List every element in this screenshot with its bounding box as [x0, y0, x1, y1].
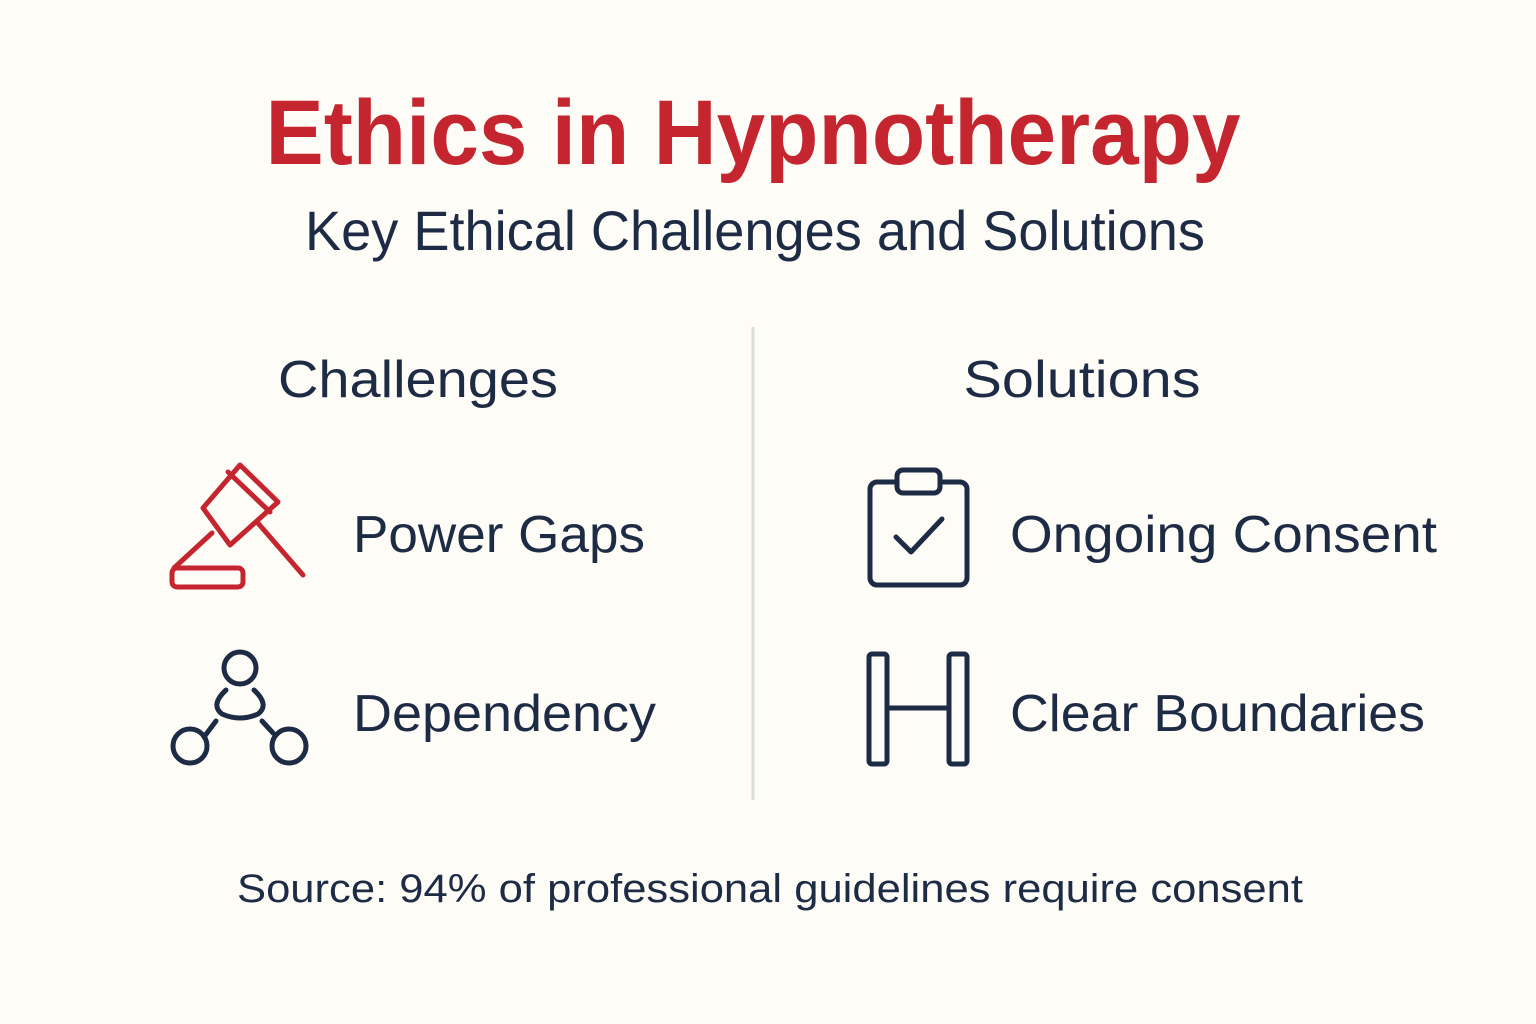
panel: solutions: [869, 351, 1438, 764]
panel: challenges: [172, 351, 656, 763]
heading: solutions: Solutions: [964, 351, 1200, 409]
icon: dependency: [173, 652, 306, 763]
icon: gavel: [172, 465, 303, 587]
text: clear boundaries: Clear Boundaries: [1010, 685, 1425, 743]
text: dependency: Dependency: [353, 685, 656, 743]
source note: Source: 94% of professional guidelines require consent: [237, 867, 1303, 911]
subtitle: Key Ethical Challenges and Solutions: [305, 199, 1205, 262]
icon: boundaries: [869, 654, 967, 764]
title: Ethics in Hypnotherapy: [266, 82, 1240, 184]
icon: clipboard: [870, 470, 967, 585]
text: ongoing consent: Ongoing Consent: [1010, 506, 1438, 564]
text: power gaps: Power Gaps: [353, 506, 645, 564]
heading: challenges: Challenges: [278, 351, 558, 409]
